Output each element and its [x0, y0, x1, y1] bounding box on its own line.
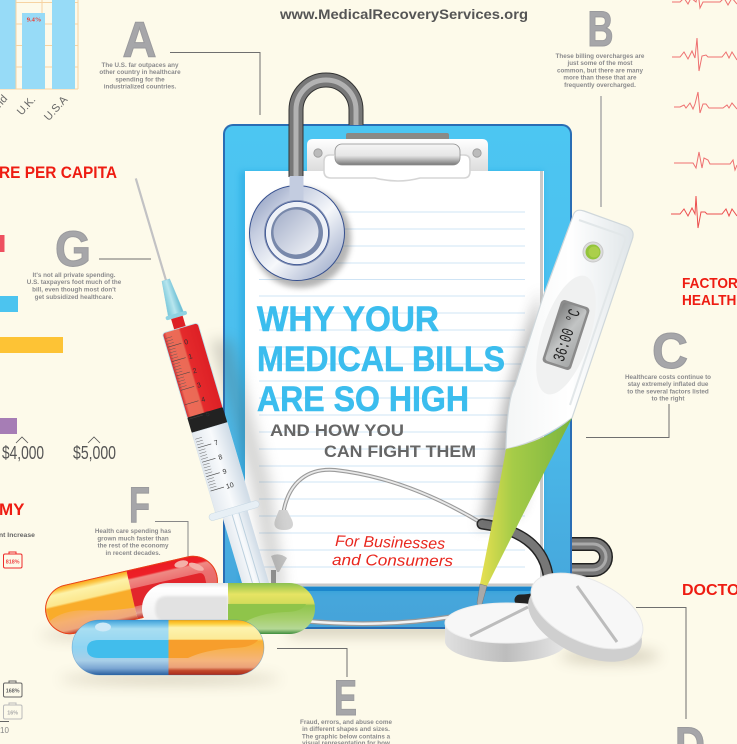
- capsule: blue and orange: [72, 620, 264, 675]
- callout B: more than these that are: [563, 74, 637, 82]
- syringe: 4: [201, 396, 206, 404]
- syringe: 3: [196, 382, 202, 390]
- stethoscope loop behind clipboard: [540, 544, 606, 570]
- subtitle: AND HOW YOU: [270, 421, 404, 440]
- stethoscope top tube: [296, 80, 356, 177]
- callout F: [95, 477, 188, 560]
- syringe: 1: [188, 353, 194, 361]
- stethoscope tube on paper: [283, 470, 549, 600]
- callout E: E: [334, 670, 357, 726]
- callout F: grown much faster than: [97, 536, 169, 542]
- clipboard: [223, 124, 572, 629]
- title: MEDICAL BILLS: [257, 340, 505, 379]
- briefcase icons bottom-left: 10: [0, 726, 9, 735]
- horizontal bar chart: per capita: [0, 235, 116, 463]
- callout G: G: [55, 221, 91, 277]
- heading: expenditure per capita: RE PER CAPITA: [0, 163, 117, 182]
- callout A: other country in healthcare: [99, 69, 181, 76]
- handwritten note: [332, 533, 453, 570]
- handwritten note: and Consumers: [332, 552, 453, 570]
- stethoscope ear tips: [271, 510, 293, 588]
- legend: percent increase: [0, 532, 35, 568]
- briefcase icons bottom-left: 16%: [7, 710, 18, 716]
- lower silver tube: [305, 617, 450, 624]
- title: WHY YOUR: [257, 300, 439, 339]
- bar chart: healthcare spending: U.S.A: [42, 93, 71, 123]
- clip plate: [307, 133, 488, 181]
- paper: [240, 171, 572, 591]
- callout D: [636, 608, 705, 744]
- briefcase icons bottom-left: [0, 681, 22, 735]
- callout B: B: [588, 1, 614, 57]
- callout A: The U.S. far outpaces any: [102, 62, 179, 69]
- syringe: [111, 171, 287, 613]
- callout G: get subsidized healthcare.: [35, 294, 114, 301]
- callout C: to the right: [652, 396, 685, 402]
- syringe: 0: [184, 339, 189, 347]
- subtitle: [270, 421, 476, 461]
- tablet: flat: [445, 603, 567, 662]
- syringe: 2: [192, 368, 198, 375]
- callout F: in recent decades.: [106, 550, 161, 557]
- callout A: industrialized countries.: [104, 84, 176, 90]
- callout B: common, but there are many: [557, 68, 644, 74]
- callout B: frequently overcharged.: [564, 82, 636, 89]
- thermometer display: [542, 299, 590, 371]
- syringe: 5: [205, 411, 211, 419]
- capsule: orange and red: [45, 556, 218, 634]
- website url: www.MedicalRecoveryServices.org: [279, 6, 528, 22]
- briefcase icons bottom-left: 168%: [6, 688, 20, 694]
- callout C: to the several factors listed: [627, 388, 709, 396]
- callout F: Health care spending has: [95, 528, 172, 535]
- syringe shadow: [210, 340, 285, 590]
- thermometer: [477, 210, 633, 605]
- callout G: It's not all private spending.: [32, 272, 116, 279]
- callout A: A: [122, 12, 156, 68]
- callout B: just some of the most: [566, 60, 633, 67]
- thermometer display: 36:00 °C: [551, 307, 586, 364]
- callout F: F: [129, 477, 150, 533]
- syringe: 8: [218, 454, 224, 462]
- thermometer button: [583, 242, 603, 262]
- callout A: spending for the: [115, 76, 165, 84]
- syringe: 7: [213, 440, 219, 447]
- syringe: 9: [222, 468, 228, 476]
- callout F: the rest of the economy: [97, 542, 169, 550]
- tablet: tilted: [516, 558, 654, 678]
- bar chart: healthcare spending: U.K.: [15, 94, 38, 118]
- stethoscope chest piece: [250, 176, 351, 288]
- callout B: [556, 1, 645, 207]
- title: [257, 300, 505, 419]
- callout C: stay extremely inflated due: [628, 381, 709, 388]
- syringe: 10: [225, 482, 235, 491]
- icon: red briefcase 818%: 818%: [6, 560, 20, 566]
- callout G: [27, 221, 151, 301]
- handwritten note: For Businesses: [335, 533, 446, 553]
- horizontal bar chart: per capita: $4,000: [2, 443, 44, 463]
- callout E: in different shapes and sizes.: [302, 726, 390, 733]
- horizontal bar chart: per capita: $5,000: [73, 443, 116, 463]
- callout E: Fraud, errors, and abuse come: [300, 719, 393, 726]
- bar chart: healthcare spending: [0, 0, 78, 123]
- shadow under clipboard and pills: [40, 622, 660, 684]
- callout G: bill, even though most don't: [32, 286, 117, 294]
- capsule: white and green: [142, 583, 315, 634]
- callout E: The graphic below contains a: [302, 734, 391, 740]
- callout C: Healthcare costs continue to: [625, 374, 711, 381]
- callout A: [99, 12, 260, 115]
- bar chart: healthcare spending: 9.4%: [27, 16, 41, 24]
- thermometer shadow: [480, 290, 540, 530]
- legend: percent increase: nt Increase: [0, 532, 35, 539]
- subtitle: CAN FIGHT THEM: [324, 442, 476, 461]
- callout G: U.S. taxpayers foot much of the: [27, 279, 122, 286]
- callout E: [277, 648, 393, 744]
- callout C: C: [652, 323, 688, 379]
- callout B: These billing overcharges are: [556, 53, 645, 60]
- heading: factors: [682, 275, 737, 309]
- ECG heartbeat lines: [671, 0, 737, 228]
- title: ARE SO HIGH: [257, 380, 469, 419]
- callout C: [586, 323, 711, 438]
- thermometer green tip: [480, 418, 572, 586]
